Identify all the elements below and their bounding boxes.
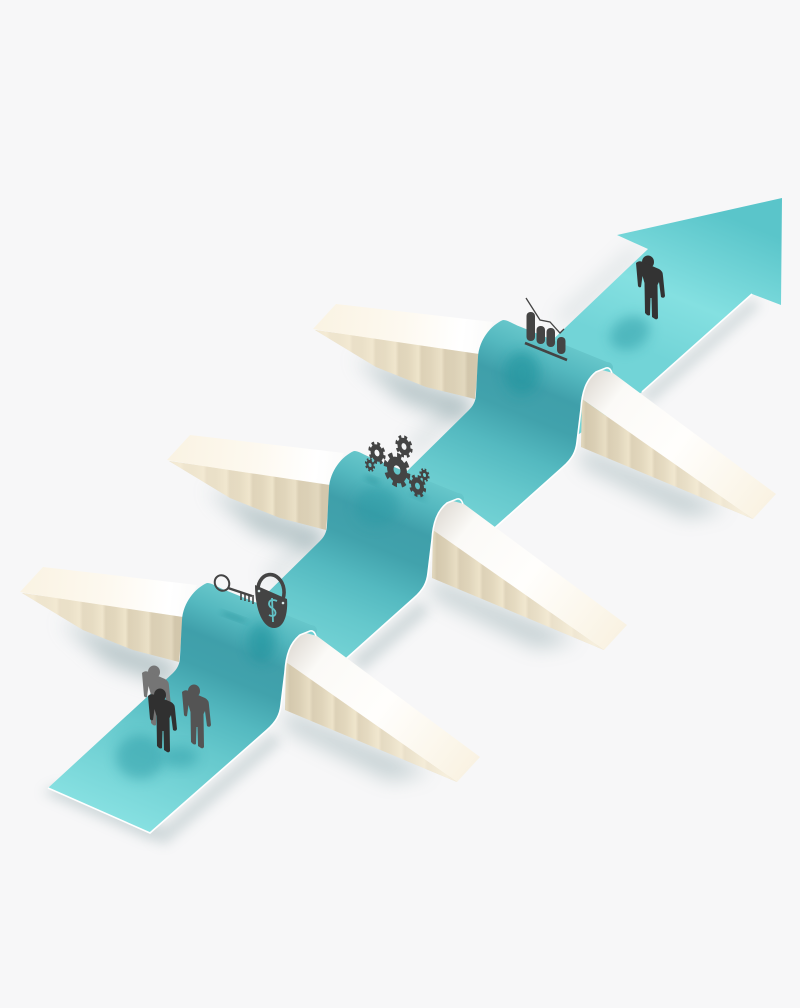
shadow: standing person bbox=[604, 309, 656, 357]
left ramp 1 bbox=[20, 567, 197, 662]
small right gear bbox=[420, 468, 429, 482]
icon: person on arrow head bbox=[636, 256, 665, 319]
upper left gear bbox=[370, 441, 384, 465]
small left gear bbox=[366, 458, 374, 472]
right ramp 1 bbox=[285, 630, 480, 782]
right ramp 3 bbox=[581, 367, 776, 519]
right ramp 2 bbox=[432, 498, 627, 650]
icon: person, right mid grey bbox=[182, 684, 211, 748]
teal ribbon 1 bbox=[48, 583, 317, 833]
icon: key bbox=[212, 573, 253, 604]
icon: person, back grey bbox=[142, 666, 171, 729]
shadow: chart icon bbox=[504, 351, 540, 395]
left ramp 3 bbox=[313, 304, 493, 399]
top gear bbox=[397, 435, 411, 458]
lower right gear bbox=[410, 474, 425, 498]
icon: person, front dark bbox=[148, 688, 177, 752]
infographic: isometric arrow over three ramps bbox=[20, 198, 782, 848]
arrow head section bbox=[500, 198, 782, 440]
teal ribbon 3 bbox=[399, 320, 613, 551]
shadow: gears icon bbox=[358, 475, 424, 522]
icon: bar chart with trend line bbox=[525, 298, 567, 360]
ground shadows bbox=[42, 245, 760, 845]
panel: hump 3 bbox=[313, 304, 776, 551]
large gear bbox=[386, 452, 408, 488]
icon: gears bbox=[366, 435, 429, 498]
panel: hump 2 bbox=[167, 435, 627, 682]
shadows: lock, key, people bbox=[116, 610, 276, 779]
teal ribbon 2 bbox=[250, 451, 464, 682]
icon: padlock bbox=[255, 573, 287, 628]
left ramp 2 bbox=[167, 435, 344, 530]
panel: hump 1 with arrow tail bbox=[20, 567, 480, 833]
